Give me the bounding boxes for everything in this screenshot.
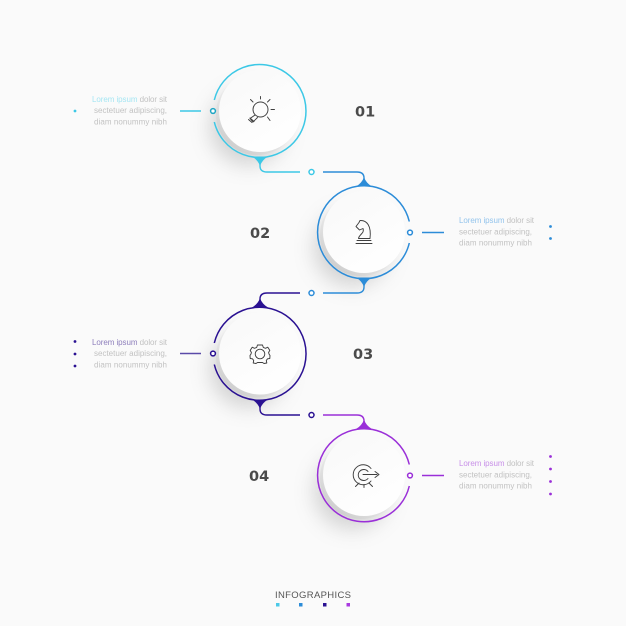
connector: step 3 to dot <box>252 400 300 415</box>
icon: target <box>353 465 379 488</box>
step 3: circle node with gear <box>180 290 314 415</box>
step 4 text: diam nonummy nibh <box>459 482 532 490</box>
icon: chess knight <box>356 220 372 244</box>
number 02: 02 <box>250 226 270 242</box>
dot: step 3 to 4 <box>309 412 314 418</box>
dash: step 4 <box>422 474 444 476</box>
dot: step 1 to 2 <box>309 170 314 174</box>
step 1: circle node with lightbulb <box>180 65 306 172</box>
step 4: circle node with target <box>309 412 444 529</box>
footer: infographics label: INFOGRAPHICS <box>275 590 351 601</box>
connector: step 2 to dot <box>323 278 372 293</box>
step 2 text: diam nonummy nibh <box>459 238 532 248</box>
icon: gear <box>250 345 270 364</box>
number 01: 01 <box>355 104 375 120</box>
connector: dot to step 2 <box>323 172 372 186</box>
footer: infographics label <box>275 590 351 606</box>
dash: step 2 <box>422 232 444 234</box>
step 1 text: diam nonummy nibh <box>94 118 167 126</box>
step 2: circle node with chess knight <box>309 170 444 293</box>
step 2 text: Lorem ipsum dolor sit <box>459 216 535 225</box>
dash: step 1 <box>180 110 201 112</box>
connector: step 1 to dot <box>252 156 300 172</box>
step 4 text: sectetuer adipiscing, <box>459 470 532 480</box>
step 3 text: sectetuer adipiscing, <box>94 349 167 358</box>
step 3 text: Lorem ipsum dolor sit <box>92 338 168 347</box>
dash: step 3 <box>180 352 201 354</box>
dot: step 1 left <box>211 109 215 113</box>
step 3 text: diam nonummy nibh <box>94 360 167 370</box>
step 1 text <box>74 95 168 126</box>
step 1 text: sectetuer adipiscing, <box>94 106 167 115</box>
connector: dot to step 3 <box>252 293 300 308</box>
step 4 text: Lorem ipsum dolor sit <box>459 459 535 468</box>
dot: step 4 right <box>408 473 412 478</box>
step 3 text <box>74 338 168 370</box>
dot: step 2 right <box>408 230 412 235</box>
dot: step 2 to 3 <box>309 290 314 296</box>
icon: lightbulb <box>248 96 274 122</box>
step 2 text <box>459 216 552 248</box>
step 1 text: Lorem ipsum dolor sit <box>92 95 168 104</box>
step 4 text <box>459 455 552 495</box>
number 04: 04 <box>249 469 269 485</box>
dot: step 3 left <box>211 351 215 356</box>
connector: dot to step 4 <box>323 415 372 429</box>
step 2 text: sectetuer adipiscing, <box>459 228 532 236</box>
number 03: 03 <box>353 347 373 363</box>
